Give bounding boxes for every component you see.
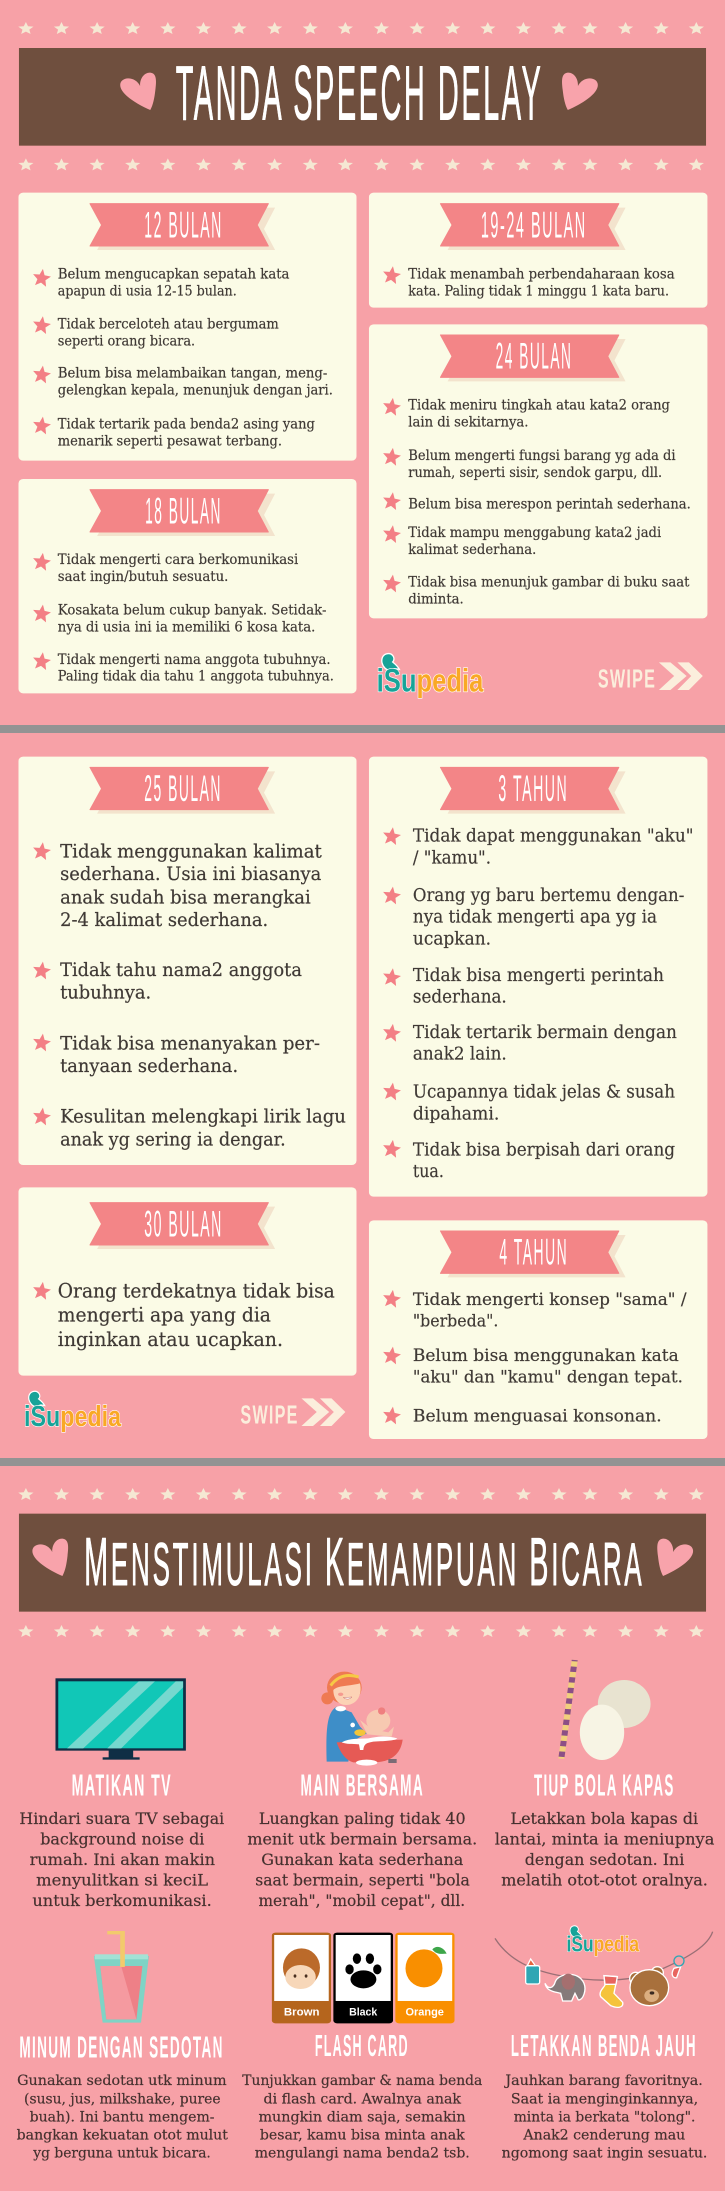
bullet: tidak bisa menanyakan [32, 1032, 320, 1077]
icon: glass with straw [94, 1933, 149, 2023]
bullet: belum bisa melambaikan: Belum bisa melambaikan tangan, meng- [58, 364, 327, 381]
panel: 18 bulan [18, 479, 356, 693]
bullet: orang yg baru [382, 885, 684, 949]
star row top [18, 22, 704, 34]
star row bottom [18, 158, 704, 170]
panel: 12 bulan: 12 BULAN [144, 205, 223, 246]
icon: flash card orange: Orange [405, 2005, 444, 2018]
bullet: orang terdekatnya: Orang terdekatnya tidak bisa [58, 1279, 335, 1302]
bullet: tidak tertarik [32, 415, 315, 449]
star row bottom [18, 1625, 704, 1637]
panel: 12 bulan [18, 193, 356, 461]
description [242, 2072, 482, 2161]
bullet: belum mengerti fungsi [382, 447, 676, 480]
icon: heart left [120, 73, 156, 110]
bullet: tidak bisa menunjuk: diminta. [408, 590, 464, 607]
logo: isupedia middle: iSupedia [24, 1401, 122, 1433]
bullet: tidak tahu nama2 [32, 959, 302, 1004]
tip: flash card [242, 1933, 482, 2161]
bullet: belum mengucapkan: apapun di usia 12-15 bulan. [58, 282, 237, 299]
bullet: tidak tertarik bermain [382, 1022, 677, 1065]
description: merah", "mobil cepat", dll. [258, 1891, 465, 1910]
bullet: tidak tertarik: Tidak tertarik pada benda2 asing yang [58, 415, 315, 432]
panel: 30 bulan: 30 BULAN [144, 1204, 223, 1245]
icon: heart left [32, 1539, 68, 1576]
bullet: tidak berceloteh: Tidak berceloteh atau bergumam [58, 315, 279, 332]
bullet: tidak menambah [382, 265, 675, 299]
description: buah). Ini bantu mengem- [30, 2108, 215, 2125]
panel: 24 bulan [369, 324, 707, 618]
text: MAIN BERSAMA [301, 1768, 424, 1802]
bullet: tidak bisa berpisah: tua. [413, 1161, 444, 1182]
bullet: tidak mengerti nama: Tidak mengerti nama anggota tubuhnya. [58, 651, 331, 667]
description [19, 1809, 224, 1910]
bullet: tidak menggunakan kalimat: anak sudah bisa merangkai [60, 887, 311, 908]
ribbon heading: 19-24 bulan [441, 204, 626, 250]
star row top [18, 1488, 704, 1500]
ribbon heading: 24 bulan [441, 335, 626, 381]
panel: 18 bulan: 18 BULAN [145, 491, 222, 532]
icon: heart right [657, 1539, 693, 1576]
bullet: tidak berceloteh [32, 315, 279, 349]
tip: tiup bola kapas [495, 1660, 714, 1889]
bullet: tidak mengerti nama: Paling tidak dia tahu 1 anggota tubuhnya. [58, 667, 334, 684]
swipe arrow top: SWIPE [598, 664, 656, 693]
description: mengulangi nama benda2 tsb. [255, 2144, 470, 2161]
panel: 3 tahun [369, 757, 707, 1197]
icon: flash card orange [395, 1933, 455, 2023]
tip: letakkan benda jauh [495, 1926, 713, 2161]
bullet: tidak menggunakan kalimat [32, 841, 322, 931]
panel: 19-24 bulan [369, 193, 707, 308]
panel: 4 tahun [369, 1220, 707, 1439]
bullet: tidak mengerti konsep [382, 1289, 687, 1331]
bullet: tidak meniru: lain di sekitarnya. [408, 413, 528, 430]
logo: isupedia in bunting: iSupedia [567, 1932, 640, 1957]
bullet: tidak tahu nama2: Tidak tahu nama2 anggota [60, 959, 302, 981]
icon: flash card black [333, 1933, 393, 2023]
bullet: tidak tahu nama2: tubuhnya. [60, 982, 151, 1004]
bullet: tidak tertarik: menarik seperti pesawat terbang. [58, 432, 282, 449]
description: besar, kamu bisa minta anak [260, 2126, 465, 2143]
ribbon heading: 4 tahun [441, 1231, 626, 1277]
icon: bunting with toys [495, 1926, 713, 2007]
bullet: orang terdekatnya: inginkan atau ucapkan. [58, 1328, 283, 1351]
description: Gunakan sedotan utk minum [17, 2072, 227, 2088]
divider bottom [0, 1458, 725, 1466]
bullet: belum mengucapkan: Belum mengucapkan sepatah kata [58, 265, 289, 282]
bullet: tidak mengerti konsep: "berbeda". [413, 1311, 498, 1331]
description: di flash card. Awalnya anak [264, 2090, 462, 2107]
swipe arrow middle: SWIPE [240, 1400, 299, 1429]
bullet: orang yg baru: ucapkan. [413, 929, 491, 949]
bullet: tidak mengerti cara: Tidak mengerti cara berkomunikasi [58, 551, 299, 567]
description: (susu, jus, milkshake, puree [24, 2090, 221, 2107]
bullet: kesulitan [32, 1106, 346, 1150]
description [495, 1809, 714, 1889]
icon: flash card brown: Brown [284, 2005, 319, 2018]
bullet: belum bisa menggunakan [382, 1345, 683, 1387]
description: Tunjukkan gambar & nama benda [242, 2072, 482, 2088]
bullet: tidak bisa menunjuk [382, 573, 690, 607]
bullet: kosakata: Kosakata belum cukup banyak. Setidak- [58, 601, 326, 618]
description: untuk berkomunikasi. [32, 1891, 212, 1910]
bullet: tidak menggunakan kalimat: Tidak menggunakan kalimat [60, 841, 322, 862]
description: mungkin diam saja, semakin [258, 2108, 466, 2125]
bullet: orang terdekatnya [32, 1279, 335, 1351]
panel: 30 bulan [18, 1187, 356, 1376]
bullet: ucapannya [382, 1081, 675, 1124]
tip: flash card: FLASH CARD [315, 2028, 409, 2063]
bullet: tidak bisa mengerti [382, 965, 664, 1008]
icon: mother bathing baby [321, 1672, 403, 1766]
tip: matikan tv [19, 1678, 224, 1910]
ribbon heading: 12 bulan [90, 204, 275, 250]
divider top [0, 725, 725, 733]
ribbon heading: 30 bulan [90, 1203, 275, 1249]
tip: minum dengan sedotan [17, 1933, 228, 2161]
bullet: tidak tertarik bermain: anak2 lain. [413, 1044, 507, 1065]
panel: 25 bulan: 25 BULAN [144, 769, 222, 809]
bullet: tidak bisa mengerti: sederhana. [413, 987, 507, 1008]
description [247, 1809, 477, 1910]
icon: flash card brown [272, 1933, 331, 2023]
title band [19, 1514, 706, 1612]
bullet: tidak mampu [382, 524, 662, 557]
header: tanda speech delay [18, 22, 706, 170]
logo: isupedia top: iSupedia [377, 663, 483, 699]
ribbon heading: 25 bulan [90, 767, 275, 814]
bullet: belum bisa melambaikan [32, 364, 333, 398]
bullet: tidak menggunakan kalimat: sederhana. Usia ini biasanya [60, 863, 322, 885]
icon: heart right [562, 73, 598, 110]
bullet: belum bisa melambaikan: gelengkan kepala, menunjuk dengan jari. [58, 381, 333, 398]
description: Hindari suara TV sebagai [19, 1809, 224, 1828]
bullet: tidak berceloteh: seperti orang bicara. [58, 332, 195, 349]
ribbon heading: 18 bulan [90, 490, 275, 536]
description: saat bermain, seperti "bola [255, 1870, 470, 1889]
description: background noise di [40, 1830, 204, 1849]
bullet: kosakata [32, 601, 326, 635]
description: menit utk bermain bersama. [247, 1830, 477, 1849]
bullet: tidak mengerti cara: saat ingin/butuh sesuatu. [58, 568, 228, 584]
description: yg berguna untuk bicara. [32, 2144, 211, 2161]
bullet: orang terdekatnya: mengerti apa yang dia [58, 1303, 271, 1327]
description [502, 2072, 707, 2161]
bullet: tidak bisa menanyakan: tanyaan sederhana. [60, 1055, 238, 1077]
panel: 25 bulan [18, 757, 356, 1165]
bullet: kosakata: nya di usia ini ia memiliki 6 kosa kata. [58, 618, 315, 635]
tip: matikan tv: MATIKAN TV [72, 1768, 172, 1802]
bullet: tidak bisa menanyakan: Tidak bisa menanyakan per- [60, 1033, 320, 1054]
tip: main bersama [247, 1672, 477, 1910]
ribbon heading: 3 tahun [441, 767, 626, 814]
icon: flash card black: Black [349, 2005, 378, 2018]
description: Gunakan kata sederhana [261, 1850, 463, 1869]
bullet: tidak dapat: / "kamu". [413, 848, 491, 868]
header: menstimulasi kemampuan bicara [18, 1488, 706, 1637]
description: menyulitkan si keciL [36, 1870, 208, 1889]
bullet: tidak dapat [382, 826, 694, 868]
description: Luangkan paling tidak 40 [259, 1809, 466, 1828]
bullet: tidak meniru [382, 396, 670, 430]
bullet: kesulitan: Kesulitan melengkapi lirik lagu [60, 1106, 346, 1127]
bullet: tidak menggunakan kalimat: 2-4 kalimat sederhana. [60, 909, 268, 931]
bullet: kesulitan: anak yg sering ia dengar. [60, 1129, 286, 1150]
bullet: tidak mengerti nama [32, 651, 334, 684]
title band [19, 48, 706, 146]
description: bangkan kekuatan otot mulut [17, 2126, 228, 2143]
icon: television [55, 1678, 186, 1760]
bullet: tidak mampu: kalimat sederhana. [408, 541, 536, 557]
text: MINUM DENGAN SEDOTAN [19, 2030, 224, 2064]
bullet: belum bisa merespon [382, 491, 691, 512]
description [17, 2072, 228, 2161]
description: rumah. Ini akan makin [30, 1850, 215, 1869]
bullet: tidak mengerti cara [32, 551, 299, 584]
bullet: belum mengucapkan [32, 265, 289, 299]
bullet: tidak bisa berpisah [382, 1139, 675, 1182]
icon: straw and cotton balls [561, 1660, 651, 1760]
logo: isupedia middle [24, 1391, 122, 1433]
bullet: ucapannya: dipahami. [413, 1104, 499, 1124]
